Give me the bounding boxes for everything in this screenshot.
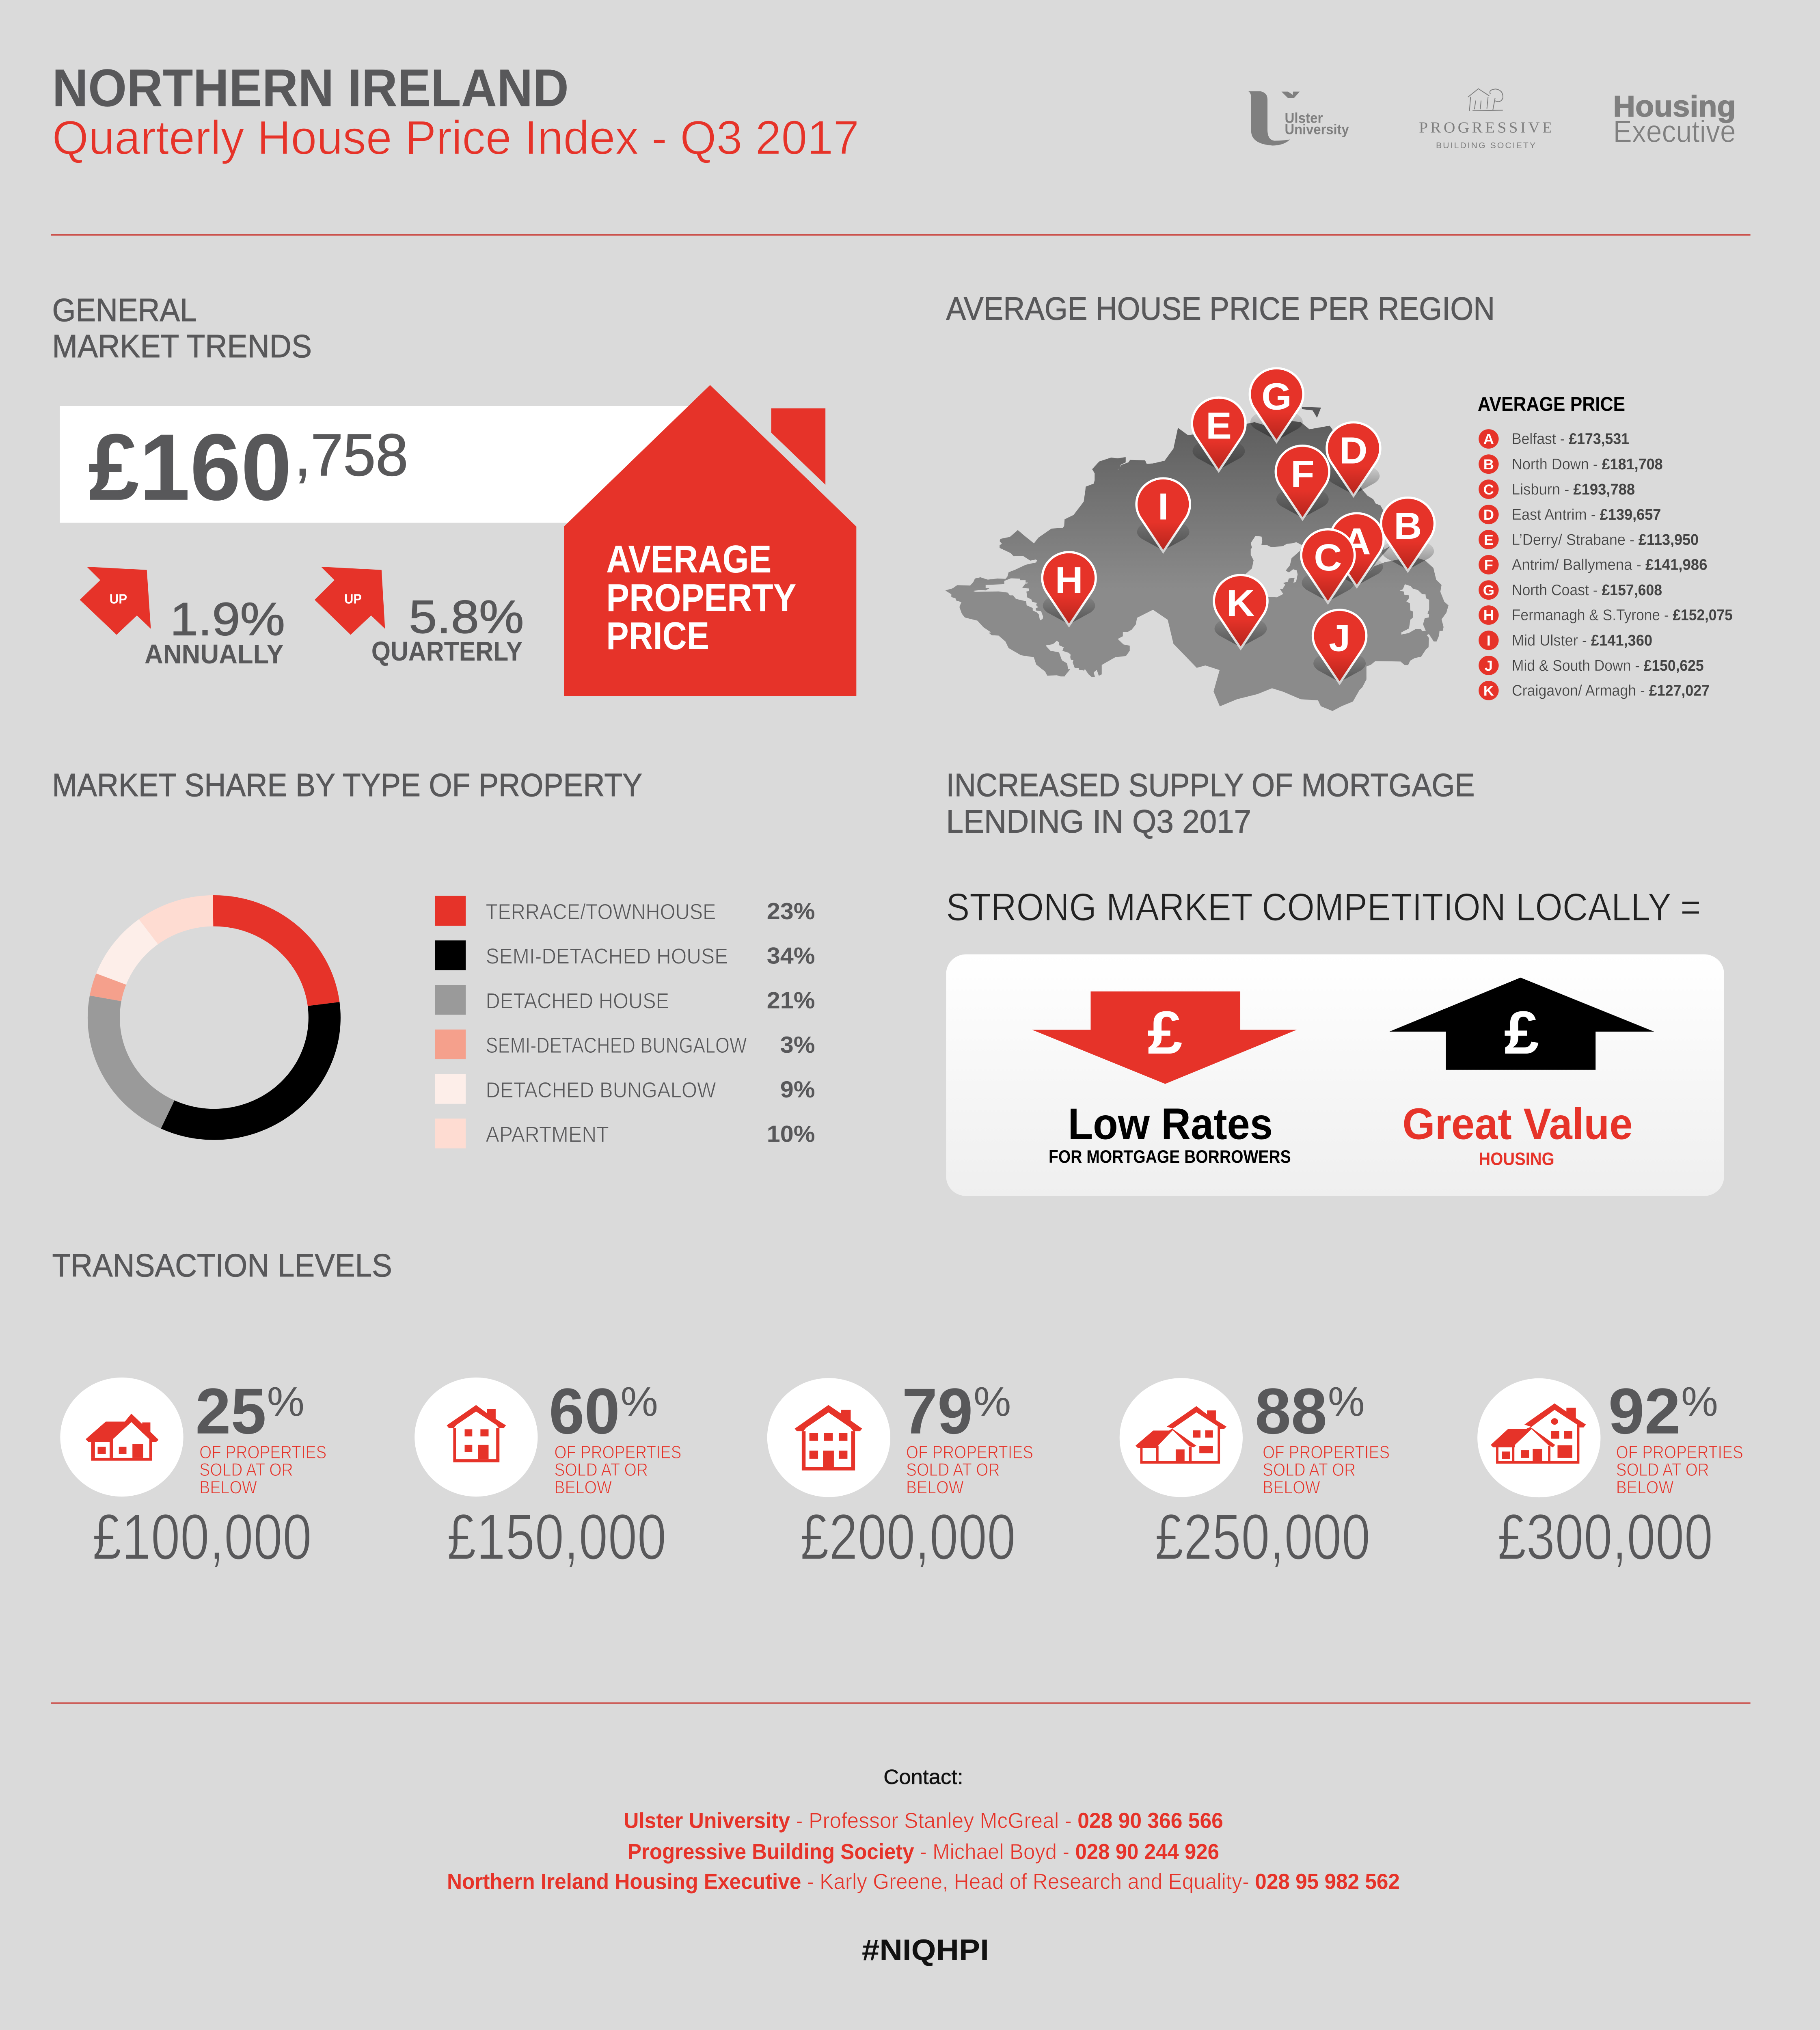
row J: Mid & South Down - £150,625 [1512,657,1704,674]
logo: Progressive Building Society: BUILDING SOCIETY [1436,141,1535,150]
contact: Housing Executive: Northern Ireland Housing Executive - Karly Greene, Head of Research and Equality- 028 95 982 562 [447,1869,1400,1894]
pin A [1330,513,1384,587]
row C: Lisburn - £193,788 [1512,481,1635,498]
logo: Ulster University: Ulster [1285,110,1323,126]
white price banner [60,406,729,523]
caption [1616,1442,1743,1497]
low rates text [1049,1099,1291,1167]
caption [1263,1442,1390,1497]
pin D: D [1339,430,1367,471]
map pin shadows [1043,410,1434,682]
row B: B [1483,456,1494,473]
pin F [1276,446,1329,519]
row C: C [1483,482,1494,498]
stat: 88% at £250,000: £250,000 [1155,1501,1370,1573]
row I: Mid Ulster - £141,360 [1512,632,1652,649]
stat: 92% at £300,000: 92 [1608,1375,1681,1447]
stat: 92% at £300,000: £300,000 [1498,1501,1713,1573]
low rates text: FOR MORTGAGE BORROWERS [1049,1147,1291,1167]
logo: Ulster University [1248,91,1349,146]
pin J [1313,610,1367,683]
stat: 25% at £100,000 [60,1375,326,1573]
icon: up arrow: UP [344,592,362,607]
caption: BELOW [554,1477,612,1497]
icon: up arrow [1390,978,1654,1070]
caption: SOLD AT OR [1616,1460,1709,1480]
row C [1479,479,1635,499]
row detached house: DETACHED HOUSE [486,988,669,1013]
stat: 79% at £200,000: 79 [902,1375,973,1447]
pin I: I [1158,486,1168,527]
heading: general market trends: MARKET TRENDS [52,328,312,365]
row apartment: 10% [767,1121,815,1147]
heading: increased supply of mortgage lending: INCREASED SUPPLY OF MORTGAGE [946,767,1475,803]
caption [199,1442,326,1497]
footer: contact details [447,1765,1400,1894]
row E: E [1484,532,1494,548]
stat: 92% at £300,000 [1477,1375,1743,1573]
house label [606,538,796,658]
price figure [89,415,408,520]
caption: BELOW [906,1477,964,1497]
pin H: H [1055,559,1083,601]
caption: BELOW [1616,1477,1674,1497]
row K: Craigavon/ Armagh - £127,027 [1512,682,1710,699]
title: NORTHERN IRELAND [52,58,569,118]
logo: Progressive Building Society [1419,89,1552,150]
stat: 60% at £150,000: % [621,1378,658,1425]
row detached bungalow [435,1074,815,1104]
icon: down arrow: £ [1147,999,1183,1067]
house label: PROPERTY [606,576,796,619]
stat: 88% at £250,000: 88 [1255,1375,1327,1447]
heading: average house price per region: AVERAGE HOUSE PRICE PER REGION [946,291,1495,327]
icon: terraced house [794,1405,862,1471]
icon: large house [1491,1404,1586,1464]
pin G [1250,368,1303,442]
stat: 79% at £200,000: £200,000 [800,1501,1016,1573]
pin E [1192,397,1246,471]
pin A: A [1343,520,1371,562]
row H: H [1483,607,1494,624]
row terrace: TERRACE/TOWNHOUSE [486,899,716,924]
stat: 60% at £150,000: £150,000 [447,1501,667,1573]
row detached house: 21% [767,987,815,1013]
logo: Housing Executive [1613,89,1736,149]
row D: D [1483,507,1494,523]
row A [1479,429,1629,449]
pin B: B [1394,505,1422,547]
row apartment [435,1119,815,1148]
icon: up arrow [80,567,151,635]
quarterly change [315,567,524,667]
contact: Progressive Building Society: Progressive Building Society - Michael Boyd - 028 90 244 926 [628,1839,1219,1864]
logo: Housing Executive: Executive [1613,114,1736,149]
house shape [564,385,856,696]
row detached bungalow: DETACHED BUNGALOW [486,1078,716,1102]
stat: 92% at £300,000: % [1681,1378,1718,1425]
stat: 88% at £250,000: % [1328,1378,1365,1425]
row semi-detached house: 34% [767,943,815,969]
pin B [1381,498,1435,571]
icon: up arrow [315,567,385,635]
stat: 60% at £150,000: 60 [549,1375,620,1447]
price figure: ,758 [294,421,408,488]
caption: OF PROPERTIES [1616,1442,1743,1462]
pin C: C [1314,536,1342,579]
stat: 79% at £200,000: % [974,1378,1011,1425]
heading: transaction levels: TRANSACTION LEVELS [52,1248,392,1284]
icon: detached house [1136,1406,1226,1464]
icon: up arrow: UP [110,592,127,607]
low rates text: Low Rates [1068,1099,1273,1149]
row terrace: 23% [767,898,815,924]
caption: OF PROPERTIES [554,1442,681,1462]
caption: SOLD AT OR [554,1460,648,1480]
pin E: E [1206,405,1232,447]
panel: average property price [60,385,856,696]
heading: general market trends: GENERAL [52,292,197,328]
row J: J [1485,658,1493,674]
row I [1479,631,1652,650]
row detached bungalow: 9% [780,1077,815,1103]
pin H [1042,552,1096,626]
caption: OF PROPERTIES [1263,1442,1390,1462]
row F: Antrim/ Ballymena - £141,986 [1512,556,1707,574]
annual change [80,567,285,669]
title: Quarterly House Price Index - Q3 2017 [52,111,859,164]
caption [554,1442,681,1497]
heading: general market trends [52,292,312,365]
icon: up arrow: £ [1504,999,1539,1067]
legend: average price per region: AVERAGE PRICE [1478,393,1625,415]
footer: contact details: Contact: [883,1765,963,1788]
row semi-detached bungalow: SEMI-DETACHED BUNGALOW [486,1033,747,1058]
contact: Ulster University: Ulster University - Professor Stanley McGreal - 028 90 366 566 [624,1808,1223,1833]
pin K [1214,575,1267,648]
row F: F [1484,557,1493,573]
pin C [1301,529,1355,603]
row A: A [1483,431,1494,447]
row K: K [1483,683,1494,699]
pin K: K [1227,582,1255,624]
stat: 25% at £100,000: £100,000 [92,1501,312,1573]
icon: narrow house [447,1405,506,1462]
caption: BELOW [199,1477,257,1497]
Rathlin Island [1302,407,1321,418]
row H: Fermanagh & S.Tyrone - £152,075 [1512,607,1733,624]
pin G: G [1261,376,1292,417]
price figure: £160 [89,415,292,520]
row terrace [435,896,815,926]
great value text: Great Value [1403,1099,1633,1149]
stat: 25% at £100,000: % [267,1378,304,1425]
row semi-detached bungalow: 3% [780,1032,815,1058]
pin D [1327,422,1380,496]
stat: 60% at £150,000 [415,1375,681,1573]
logo: Ulster University: University [1285,121,1349,137]
quarterly change: 5.8% [409,591,524,643]
pin F: F [1291,453,1315,495]
caption: SOLD AT OR [1263,1460,1356,1480]
logo: Housing Executive: Housing [1613,89,1736,123]
row semi-detached house: SEMI-DETACHED HOUSE [486,944,728,969]
house label: AVERAGE [606,538,771,581]
stat: 25% at £100,000: 25 [195,1375,266,1447]
caption: BELOW [1263,1477,1320,1497]
annual change: 1.9% [170,593,285,645]
legend: average price per region [1478,393,1733,700]
caption: SOLD AT OR [906,1460,1000,1480]
donut chart: market share [104,911,324,1124]
caption: OF PROPERTIES [199,1442,326,1462]
caption: SOLD AT OR [199,1460,293,1480]
row detached house [435,985,815,1015]
caption: OF PROPERTIES [906,1442,1033,1462]
icon: down arrow [1032,991,1297,1084]
legend: property types [435,896,815,1148]
caption [906,1442,1033,1497]
annual change: ANNUALLY [145,639,284,669]
row apartment: APARTMENT [486,1122,609,1147]
heading: increased supply of mortgage lending [946,767,1475,840]
icon: bungalow [86,1414,159,1461]
stat: 79% at £200,000 [767,1375,1033,1573]
title [52,58,859,164]
heading: increased supply of mortgage lending: LENDING IN Q3 2017 [946,804,1251,840]
logo: Progressive Building Society: PROGRESSIVE [1419,119,1552,136]
panel: low rates and great value [946,954,1724,1196]
row I: I [1487,633,1491,649]
hashtag: #NIQHPI [862,1933,989,1967]
row D: East Antrim - £139,657 [1512,506,1661,523]
row G: North Coast - £157,608 [1512,581,1662,599]
heading: market share by type of property: MARKET SHARE BY TYPE OF PROPERTY [52,767,642,803]
stat: 88% at £250,000 [1120,1375,1390,1573]
quarterly change: QUARTERLY [371,636,522,667]
row A: Belfast - £173,531 [1512,430,1629,448]
pin J: J [1329,617,1350,659]
great value text [1403,1099,1633,1169]
great value text: HOUSING [1479,1149,1554,1169]
row E: L’Derry/ Strabane - £113,950 [1512,531,1699,549]
house label: PRICE [606,614,709,658]
row G: G [1483,582,1494,598]
subheading: strong market competition: STRONG MARKET COMPETITION LOCALLY = [946,885,1701,929]
map: Northern Ireland [946,407,1448,710]
pin I [1136,478,1190,552]
row B: North Down - £181,708 [1512,456,1663,473]
row semi-detached house [435,940,815,970]
